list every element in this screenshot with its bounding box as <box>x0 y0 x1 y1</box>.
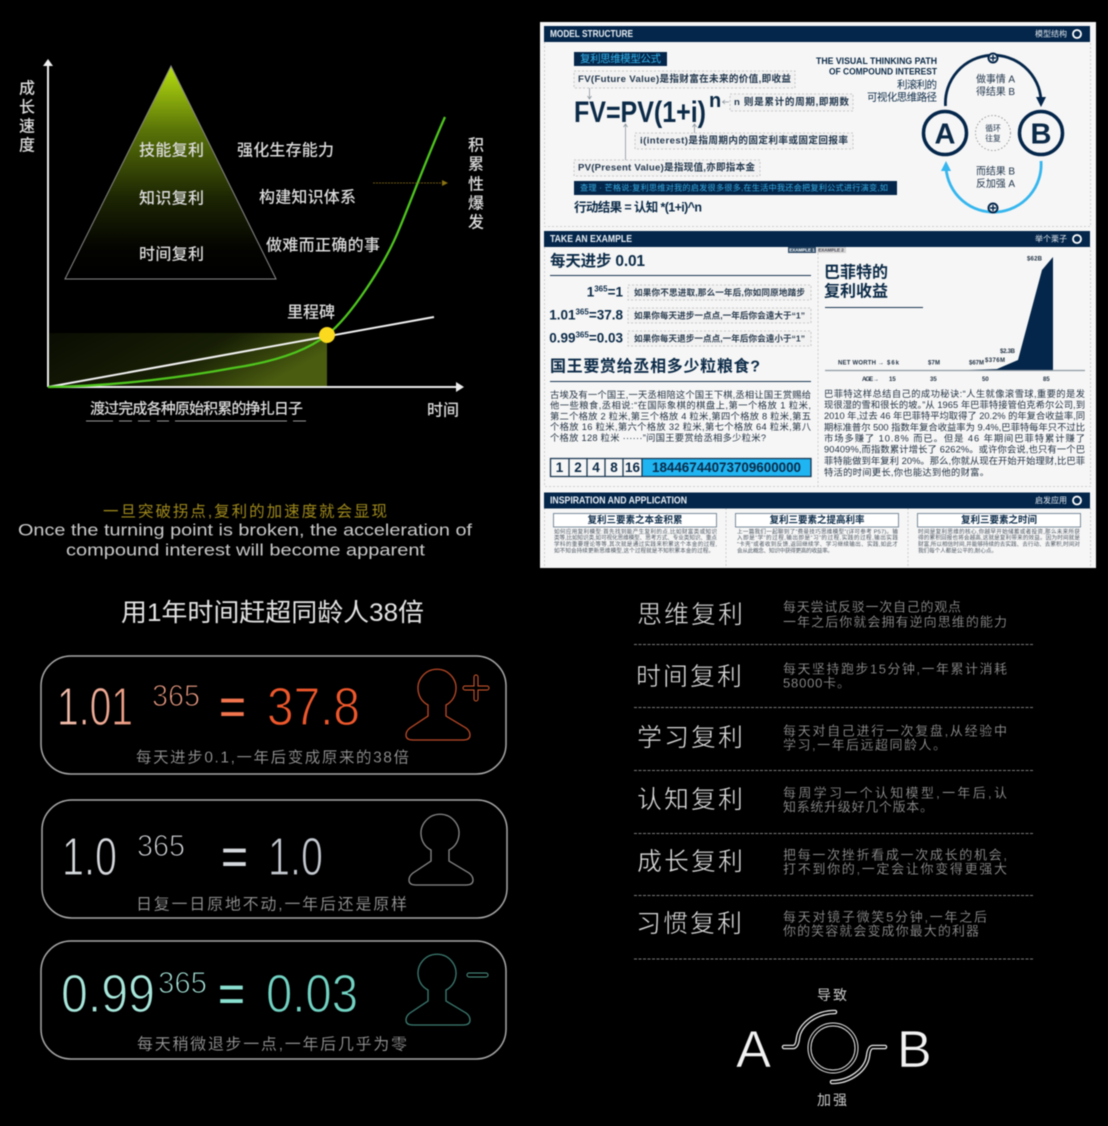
row: time: 时间复利 <box>636 663 742 691</box>
y axis title: 长 <box>19 98 35 116</box>
row: habit: 习惯复利 <box>636 910 742 938</box>
equation: = <box>221 827 248 887</box>
Buffett story text: 现很湿的雪和很长的坡。”从 1965 年巴菲特接管伯克希尔公司,到 <box>824 399 1085 410</box>
chart labels: 15 <box>889 377 896 383</box>
Buffett heading: 复利收益 <box>824 282 888 300</box>
formula: FV=PV(1+i) <box>574 96 706 129</box>
label: reinforces: 加强 <box>817 1092 849 1108</box>
row 1: 365 <box>594 284 608 294</box>
pyramid labels: 做难而正确的事 <box>266 236 380 254</box>
row: growth: 把每一次挫折看成一次成长的机会, <box>783 848 1007 862</box>
row: growth: 成长复利 <box>637 848 743 876</box>
chessboard grain row: 1 <box>556 460 564 475</box>
FV note <box>574 71 795 88</box>
pyramid labels: 技能复利 <box>139 142 204 160</box>
row: thinking: 每天尝试反驳一次自己的观点 <box>783 600 961 614</box>
row: learning: 学习复利 <box>637 724 743 752</box>
column: interest rate: 复利三要素之提高利率 <box>769 514 865 526</box>
visual path title: 利滚利的 <box>897 78 937 91</box>
row 1: 如果你不思进取,那么一年后,你如同原地踏步 <box>634 286 805 298</box>
y axis title <box>19 80 35 154</box>
dashed underline <box>86 420 306 422</box>
formula exponent: n <box>709 90 721 112</box>
example tabs: EXAMPLE 2 <box>818 248 844 252</box>
row: learning: 每天对自己进行一次复盘,从经验中 <box>783 724 1007 738</box>
column: interest rate: 会从此概念、知识中获得更高的收益率。 <box>737 546 833 554</box>
Buffett story text: 2010 年,过去 46 年巴菲特平均取得了 20.2% 的年复合收益率,同 <box>824 410 1085 421</box>
diagram: A leads to B loop <box>736 987 932 1108</box>
chart labels: $7M <box>928 360 940 366</box>
column: principal: 如何应用复利模型:首先找到能产生复利的点,比如财富类或知识 <box>554 528 717 536</box>
center cycle: 循环 <box>985 123 1001 133</box>
column: time: 财富,所以相信时间,并能够持续的去实践、去行动、去累积,时间对 <box>918 540 1080 548</box>
Buffett story text: 巴菲特这样总结自己的成功秘诀:“人生就像滚雪球,重要的是发 <box>824 388 1085 399</box>
icon: person <box>409 814 473 885</box>
y axis title: 成 <box>19 80 35 98</box>
i note: i(interest)是指周期内的固定利率或固定回报率 <box>640 134 848 146</box>
column: principal: 复利三要素之本金积累 <box>587 514 683 526</box>
column: time: 时间是复利思维的核心,你越早开始储蓄或者投资,那么未来所获 <box>918 528 1080 536</box>
x axis <box>48 386 457 388</box>
caption: 日复一日原地不动,一年后还是原样 <box>136 896 407 914</box>
equation: 37.8 <box>267 677 360 737</box>
row 2: 如果你每天进步一点点,一年后你会遠大于“1” <box>634 310 805 320</box>
chessboard grain row: 4 <box>592 460 600 475</box>
header bar: INSPIRATION AND APPLICATION <box>550 494 687 506</box>
English caption line 1: Once the turning point is broken, the acceleration of <box>18 520 472 540</box>
header bar: 启发应用 <box>1035 495 1067 505</box>
i note <box>635 133 853 149</box>
row 3: 365 <box>575 330 589 340</box>
panel: model sheet <box>540 22 1096 568</box>
Buffett rule <box>825 306 923 308</box>
pyramid labels: 构建知识体系 <box>259 188 356 206</box>
pyramid labels: 时间复利 <box>139 246 204 264</box>
swirl arcs <box>784 1012 885 1082</box>
panel: 0.99 card <box>41 941 506 1059</box>
chart labels: $6k <box>887 360 900 366</box>
top arc <box>945 55 1041 106</box>
example tabs <box>788 247 846 253</box>
equation: 1.0 <box>268 827 323 887</box>
equation: = <box>218 964 245 1024</box>
column: time: 复利三要素之时间 <box>961 514 1037 526</box>
net worth chart <box>825 256 1085 383</box>
plus top <box>988 54 998 62</box>
row: growth <box>637 848 1007 876</box>
icon: person plus <box>406 669 487 740</box>
explosive accumulation label: 积 <box>468 136 484 154</box>
center ring <box>810 1024 856 1072</box>
chart labels: 50 <box>982 377 989 383</box>
chart labels <box>838 256 1050 383</box>
Buffett heading: 巴菲特的 <box>824 262 888 282</box>
milestone shaded area <box>49 333 327 386</box>
y axis title: 度 <box>19 136 35 154</box>
row: cognition <box>637 786 1007 814</box>
node B <box>1020 112 1062 154</box>
column: principal: 如不知会持续更新思维模型,这个过程就是不知积累本金的过程。 <box>554 546 714 554</box>
section: inspiration and application <box>544 492 1090 554</box>
loop diagram <box>924 54 1062 212</box>
explosive accumulation label: 发 <box>468 214 484 232</box>
letter A: A <box>736 1021 771 1079</box>
chart labels: $62B <box>1027 256 1043 262</box>
visual path title <box>816 56 938 104</box>
row: time: 58000卡。 <box>783 676 850 690</box>
bottom arc <box>946 161 1041 212</box>
visual path title: OF COMPOUND INTEREST <box>829 66 937 78</box>
row: thinking <box>637 600 1007 630</box>
node A <box>924 112 966 154</box>
row 2: 365 <box>575 308 589 316</box>
row: cognition: 每周学习一个认知模型,一年后,认 <box>783 786 1007 800</box>
Buffett story text: 特活的时间更长,你也能达到他的财富。 <box>824 466 989 478</box>
visual path title: 可视化思维路径 <box>867 90 938 104</box>
header bar: 模型结构 <box>1035 28 1067 38</box>
row: learning: 学习,一年后远超同龄人。 <box>783 738 946 752</box>
heading rule <box>550 274 811 276</box>
card frame <box>41 941 506 1059</box>
pyramid labels <box>139 142 380 264</box>
x axis arrow <box>456 382 464 392</box>
column: interest rate <box>736 514 898 554</box>
formula badge: 复利思维模型公式 <box>580 52 662 65</box>
row 3: =0.03 <box>589 330 623 346</box>
caption: 每天稍微退步一点,一年后几乎为零 <box>137 1036 407 1054</box>
chessboard grain row: 18446744073709600000 <box>652 460 801 475</box>
English caption line 2: compound interest will become apparent <box>66 540 425 560</box>
king story text: 个格放 16 粒米,第六个格放 32 粒米,第七个格放 64 粒米,第八 <box>550 421 812 432</box>
letter B: B <box>897 1021 932 1079</box>
column: interest rate: 入即是“学”的过程,输出即是“习”的过程,实践的过程,输出实践 <box>737 534 898 542</box>
chart labels: $376M <box>985 358 1005 364</box>
compound growth curve <box>48 117 445 387</box>
chessboard grain row <box>550 458 811 477</box>
note arrows <box>588 88 729 160</box>
row: time <box>636 662 1007 691</box>
explosive accumulation label: 爆 <box>468 194 484 212</box>
row: habit: 你的笑容就会变成你最大的利器 <box>783 924 979 938</box>
explosive accumulation label: 累 <box>468 156 484 174</box>
visual path title: THE VISUAL THINKING PATH <box>816 56 937 67</box>
icon: person minus <box>406 954 486 1025</box>
panel: 1.0 card <box>42 800 507 918</box>
equation: 0.99 <box>61 964 155 1024</box>
chart labels: AGE → <box>862 377 879 383</box>
chart labels: $67M <box>969 360 984 366</box>
row 3 <box>549 330 811 346</box>
center cycle: 往复 <box>985 133 1001 143</box>
equation: 0.03 <box>266 964 358 1024</box>
Buffett story text: 期标准普尔 500 指数年复合收益率为 9.4%,巴菲特每年只不过比 <box>824 422 1085 432</box>
example tabs: EXAMPLE 1 <box>789 248 815 252</box>
PV note <box>574 160 760 176</box>
header bar: MODEL STRUCTURE <box>550 28 633 40</box>
node A: A <box>935 118 956 150</box>
dotted arrow <box>373 180 448 186</box>
row: cognition: 知系统升级好几个版本。 <box>783 800 933 814</box>
row 2: =37.8 <box>589 308 623 322</box>
linear growth line <box>48 317 434 387</box>
equation <box>57 677 360 737</box>
row: learning <box>637 724 1007 752</box>
loop labels <box>976 72 1015 190</box>
PV note: PV(Present Value)是指现值,亦即指本金 <box>578 162 755 174</box>
Munger quote bar: 查理 · 芒格说:复利思维对我的启发很多很多,在生活中我还会把复利公式进行演变,如 <box>580 182 888 192</box>
explosive accumulation label: 性 <box>468 176 484 194</box>
equation: 365 <box>152 678 200 713</box>
row: thinking: 思维复利 <box>637 601 743 629</box>
loop labels: 做事情 A <box>976 72 1015 86</box>
equation: 365 <box>137 828 185 863</box>
center cycle <box>976 116 1010 150</box>
card frame <box>41 656 506 774</box>
Buffett story text: 菲特能做到年复利 20%。那么,你就从现在开始开始理财,比巴菲 <box>824 455 1085 466</box>
row: cognition: 认知复利 <box>637 786 743 814</box>
row 2: 1.01 <box>549 308 575 322</box>
column: principal <box>554 514 717 554</box>
baseline <box>825 370 1085 372</box>
y axis title: 速 <box>19 118 35 136</box>
column: time <box>918 514 1080 554</box>
header bar: 举个栗子 <box>1035 234 1067 244</box>
Buffett story text: 市场多赚了 10.8% 而已。但是 46 年期间巴菲特累计赚了 <box>824 432 1085 444</box>
header bar <box>544 492 1090 508</box>
king question heading: 国王要赏给丞相多少粒粮食? <box>550 356 760 376</box>
milestone dot <box>319 327 335 343</box>
label: leads to: 导致 <box>817 987 849 1003</box>
chessboard grain row: 2 <box>574 460 582 475</box>
equation: 1.01 <box>57 677 133 737</box>
equation <box>61 964 358 1024</box>
equation: = <box>219 677 246 737</box>
chart labels: 35 <box>930 377 937 383</box>
row: habit: 每天对镜子微笑5分钟,一年之后 <box>783 910 987 924</box>
growth curve chart <box>19 59 484 421</box>
equation: 365 <box>158 965 207 1000</box>
chessboard grain row: 16 <box>625 460 640 475</box>
king story text: 他一些粮食,丞相说:“在国际象棋的棋盘上,第一个格放 1 粒米, <box>550 400 811 410</box>
x axis title: 时间 <box>427 402 459 420</box>
row 2 <box>549 308 811 323</box>
caption: 每天进步0.1,一年后变成原来的38倍 <box>136 748 409 766</box>
pyramid <box>65 66 276 279</box>
pyramid labels: 强化生存能力 <box>237 142 334 160</box>
Buffett story text: 90409%,而指数累计增长了 6262%。或许你会说,也只有一个巴 <box>824 444 1085 454</box>
Chinese caption: 一旦突破拐点,复利的加速度就会显现 <box>103 502 387 520</box>
panel: 1.01 card <box>41 656 506 774</box>
row 1 <box>587 284 811 300</box>
list: types of compounding <box>634 600 1033 959</box>
header bar <box>544 231 1090 247</box>
bottom arrowhead <box>941 161 951 171</box>
section: take an example <box>544 231 1090 478</box>
Buffett heading <box>824 262 888 300</box>
chart labels: $2.3B <box>1000 349 1016 355</box>
Munger quote bar <box>574 181 897 195</box>
king story text: 个格放 128 粒米 ······”问国王要赏给丞相多少粒米? <box>550 432 766 443</box>
row: thinking: 一年之后你就会拥有逆向思维的能力 <box>783 614 1007 630</box>
action formula: 行动结果 = 认知 *(1+i)^n <box>574 200 702 214</box>
loop labels: 而结果 B <box>976 164 1015 178</box>
king story text <box>550 389 812 443</box>
chart labels: NET WORTH → <box>838 360 884 366</box>
heading rule <box>550 380 811 382</box>
column: interest rate: 上一篇我们一起聊到了“费曼技巧思维模型”(详可参考 P57)。输 <box>737 528 898 536</box>
row: growth: 打不到你的,一定会让你变得更强大 <box>783 862 1007 876</box>
heading: catch up 38 times: 用1年时间赶超同龄人38倍 <box>121 599 424 627</box>
top arrowhead <box>1036 97 1046 107</box>
y axis arrow <box>43 59 53 66</box>
row: time: 每天坚持跑步15分钟,一年累计消耗 <box>783 662 1007 676</box>
pyramid labels: 知识复利 <box>139 190 204 208</box>
row: habit <box>636 910 987 938</box>
column: principal: 学科的重要理论等等,其次就是通过实践来积累这个本金的过程, <box>554 540 717 548</box>
daily progress heading: 每天进步 0.01 <box>550 251 645 270</box>
y axis <box>47 66 49 387</box>
column: principal: 类等,比如知识类,如可视化思维模型、思考方式、专业类知识、重点 <box>554 534 717 542</box>
FV note: FV(Future Value)是指财富在未来的价值,即收益 <box>578 73 791 85</box>
panel background <box>540 22 1096 568</box>
row 3: 0.99 <box>549 330 575 346</box>
column: time: 得的累积回报也将会越高,这就是复利带来的效益。因为时间就是 <box>918 534 1080 542</box>
equation rows <box>549 284 811 346</box>
dotted frames <box>544 42 1090 566</box>
chart area <box>968 257 1053 371</box>
column: time: 我们每个人都是公平的,耐心点。 <box>918 546 997 554</box>
equation <box>62 827 323 887</box>
n note: n 则是累计的周期,即期数 <box>734 96 849 108</box>
explosive accumulation label <box>468 136 484 232</box>
king story text: 古埃及有一个国王,一天丞相陪这个国王下棋,丞相让国王赏赐给 <box>550 389 811 400</box>
struggle caption: 渡过完成各种原始积累的挣扎日子 <box>90 400 303 418</box>
header bar <box>544 26 1090 42</box>
chart labels: 85 <box>1043 377 1050 383</box>
section: model structure <box>544 26 1090 214</box>
milestone label: 里程碑 <box>287 304 335 322</box>
loop labels: 反加强 A <box>976 178 1015 190</box>
equation: 1.0 <box>62 827 117 887</box>
king story text: 第二个格放 2 粒米,第三个格放 4 粒米,第四个格放 8 粒米,第五 <box>550 410 811 422</box>
loop labels: 得结果 B <box>976 85 1015 98</box>
node B: B <box>1031 118 1051 150</box>
n note <box>730 94 853 111</box>
row 3: 如果你每天退步一点点,一年后你会遠小于“1” <box>634 332 805 344</box>
row 1: 1 <box>587 284 594 300</box>
plus bottom <box>988 204 998 212</box>
Buffett story text <box>824 388 1085 478</box>
turning point caption <box>18 502 472 560</box>
row 1: =1 <box>608 284 623 300</box>
chessboard grain row: 8 <box>610 460 618 475</box>
column: interest rate: “卡壳”或者收到反馈,返回继续学、学习继续输出、实践,如此才 <box>737 540 898 548</box>
card frame <box>42 800 507 918</box>
header bar: TAKE AN EXAMPLE <box>550 233 632 245</box>
